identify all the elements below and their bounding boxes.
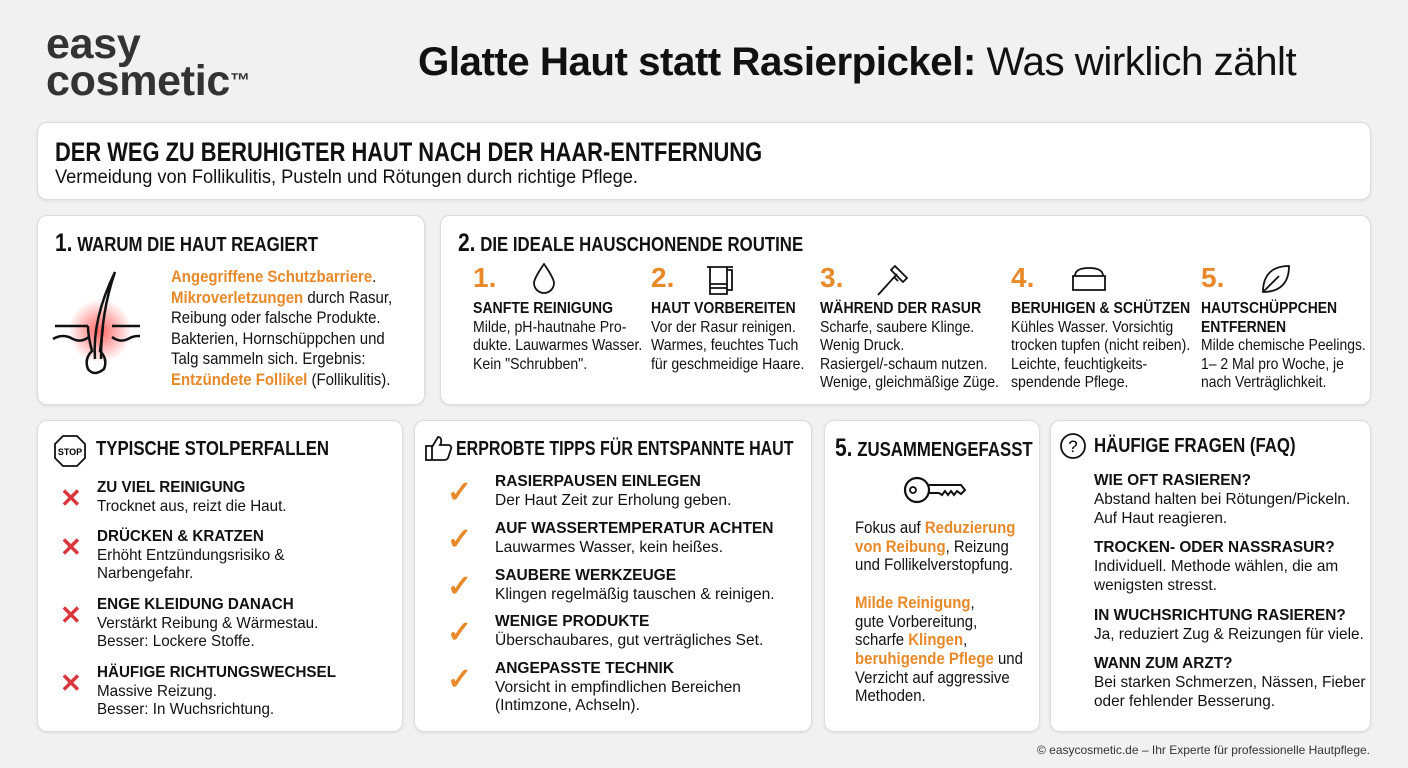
text: von Reibung, Reizung: [855, 537, 1009, 556]
items: Besser: In Wuchsrichtung.: [97, 701, 274, 718]
items: ✓: [447, 570, 472, 603]
questions: Abstand halten bei Rötungen/Pickeln.: [1094, 491, 1350, 508]
text: Entzündete Follikel (Follikulitis).: [171, 370, 390, 389]
step 4: Kühles Wasser. Vorsichtig: [1011, 318, 1173, 336]
step 5: nach Verträglichkeit.: [1201, 374, 1326, 391]
icon: razor: [877, 264, 908, 296]
logo: [46, 20, 250, 105]
panel: stolperfallen: [37, 420, 403, 732]
step 5: ENTFERNEN: [1201, 318, 1286, 336]
items: DRÜCKEN & KRATZEN: [97, 528, 264, 545]
items: ✕: [60, 600, 82, 630]
items: Erhöht Entzündungsrisiko &: [97, 546, 285, 564]
icon: towel: [707, 266, 733, 295]
text: Fokus auf Reduzierung: [855, 518, 1015, 537]
questions: Bei starken Schmerzen, Nässen, Fieber: [1094, 674, 1365, 691]
step 4: 4.: [1011, 262, 1034, 293]
step 3: WÄHREND DER RASUR: [820, 300, 981, 317]
text: Angegriffene Schutzbarriere.: [171, 267, 376, 286]
items: Klingen regelmäßig tauschen & reinigen.: [495, 586, 775, 602]
icon: drop: [533, 262, 555, 294]
step 2: Vor der Rasur reinigen.: [651, 318, 796, 336]
items: ZU VIEL REINIGUNG: [97, 479, 245, 496]
step 1: 1.: [473, 262, 496, 293]
step 2: 2.: [651, 262, 674, 293]
questions: WIE OFT RASIEREN?: [1094, 472, 1251, 489]
text: Milde Reinigung,: [855, 593, 975, 612]
step 2: [651, 262, 804, 372]
text: scharfe Klingen,: [855, 630, 967, 649]
text: Methoden.: [855, 686, 926, 705]
title: Glatte Haut statt Rasierpickel: Was wirklich zählt: [418, 39, 1296, 84]
items: WENIGE PRODUKTE: [495, 613, 649, 630]
text: [855, 518, 1023, 705]
questions: oder fehlender Besserung.: [1094, 693, 1275, 710]
step 2: für geschmeidige Haare.: [651, 356, 804, 372]
step 3: Wenige, gleichmäßige Züge.: [820, 374, 999, 391]
step 5: [1201, 262, 1366, 391]
step 5: 1– 2 Mal pro Woche, je: [1201, 356, 1344, 372]
items: Narbengefahr.: [97, 565, 193, 582]
heading: 2. DIE IDEALE HAUSCHONENDE ROUTINE: [458, 229, 803, 257]
items: [60, 479, 336, 718]
text: Verzicht auf aggressive: [855, 668, 1010, 687]
panel: warum die haut reagiert: [37, 215, 425, 405]
icon: cream jar: [1072, 267, 1106, 291]
text: Mikroverletzungen durch Rasur,: [171, 288, 392, 307]
step 1: Kein "Schrubben".: [473, 356, 587, 372]
questions: Ja, reduziert Zug & Reizungen für viele.: [1094, 626, 1364, 643]
step 3: Rasiergel/-schaum nutzen.: [820, 356, 987, 372]
items: Verstärkt Reibung & Wärmestau.: [97, 614, 318, 632]
step 3: Scharfe, saubere Klinge.: [820, 318, 974, 336]
items: ✓: [447, 523, 472, 556]
items: Der Haut Zeit zur Erholung geben.: [495, 492, 731, 508]
items: ✓: [447, 616, 472, 649]
step 1: [473, 262, 642, 372]
panel: tipps: [414, 420, 812, 732]
heading: HÄUFIGE FRAGEN (FAQ): [1094, 435, 1296, 457]
questions: [1094, 472, 1366, 710]
icon: thumbs up: [425, 436, 452, 461]
icon: question: ?: [1068, 437, 1078, 456]
panel: banner: [37, 122, 1371, 200]
step 4: Leichte, feuchtigkeits-: [1011, 356, 1147, 372]
questions: wenigsten stresst.: [1094, 577, 1217, 594]
step 1: SANFTE REINIGUNG: [473, 300, 613, 317]
step 4: trocken tupfen (nicht reiben).: [1011, 337, 1190, 354]
panel: faq: [1050, 420, 1371, 732]
step 2: Warmes, feuchtes Tuch: [651, 337, 798, 354]
heading: 1. WARUM DIE HAUT REAGIERT: [55, 229, 318, 257]
items: ENGE KLEIDUNG DANACH: [97, 596, 294, 613]
items: HÄUFIGE RICHTUNGSWECHSEL: [97, 664, 336, 681]
questions: TROCKEN- ODER NASSRASUR?: [1094, 539, 1335, 556]
items: Lauwarmes Wasser, kein heißes.: [495, 538, 723, 556]
icon: key: [904, 476, 966, 504]
step 4: BERUHIGEN & SCHÜTZEN: [1011, 300, 1190, 317]
logo: cosmetic™: [46, 57, 250, 105]
text: Talg sammeln sich. Ergebnis:: [171, 349, 366, 368]
step 5: Milde chemische Peelings.: [1201, 337, 1366, 354]
items: ✓: [447, 476, 472, 509]
questions: Individuell. Methode wählen, die am: [1094, 558, 1338, 575]
step 5: HAUTSCHÜPPCHEN: [1201, 300, 1337, 317]
logo: easy: [46, 20, 140, 68]
panel: zusammengefasst: [824, 420, 1040, 732]
heading: TYPISCHE STOLPERFALLEN: [96, 438, 329, 460]
text: beruhigende Pflege und: [855, 649, 1023, 668]
text: gute Vorbereitung,: [855, 612, 977, 631]
banner subtitle: Vermeidung von Follikulitis, Pusteln und Rötungen durch richtige Pflege.: [55, 167, 638, 188]
items: ✕: [60, 532, 82, 562]
items: ✓: [447, 663, 472, 696]
items: AUF WASSERTEMPERATUR ACHTEN: [495, 520, 773, 537]
heading: 5. ZUSAMMENGEFASST: [835, 434, 1033, 462]
items: Vorsicht in empfindlichen Bereichen: [495, 678, 741, 696]
items: (Intimzone, Achseln).: [495, 697, 640, 714]
questions: Auf Haut reagieren.: [1094, 510, 1227, 527]
step 3: Wenig Druck.: [820, 337, 904, 354]
text: [171, 267, 392, 389]
panel: routine: [440, 215, 1371, 405]
step 3: [820, 262, 999, 391]
banner heading: DER WEG ZU BERUHIGTER HAUT NACH DER HAAR-ENTFERNUNG: [55, 137, 762, 167]
questions: IN WUCHSRICHTUNG RASIEREN?: [1094, 607, 1346, 624]
items: Besser: Lockere Stoffe.: [97, 633, 255, 650]
items: ✕: [60, 668, 82, 698]
items: Massive Reizung.: [97, 682, 217, 700]
step 2: HAUT VORBEREITEN: [651, 300, 796, 317]
text: Bakterien, Hornschüppchen und: [171, 329, 385, 348]
items: ANGEPASSTE TECHNIK: [495, 660, 674, 677]
items: [447, 473, 775, 714]
icon: question: [1060, 433, 1086, 459]
text: und Follikelverstopfung.: [855, 555, 1013, 574]
step 4: spendende Pflege.: [1011, 374, 1128, 391]
step 5: 5.: [1201, 262, 1224, 293]
step 4: [1011, 262, 1190, 391]
items: ✕: [60, 483, 82, 513]
text: Reibung oder falsche Produkte.: [171, 308, 381, 327]
icon: leaf: [1262, 265, 1290, 293]
icon: hair follicle: [52, 272, 140, 374]
icon: stop: [54, 435, 86, 467]
items: Überschaubares, gut verträgliches Set.: [495, 632, 763, 648]
step 1: Milde, pH-hautnahe Pro-: [473, 318, 626, 336]
items: SAUBERE WERKZEUGE: [495, 567, 676, 584]
items: Trocknet aus, reizt die Haut.: [97, 498, 287, 514]
questions: WANN ZUM ARZT?: [1094, 655, 1232, 672]
footer: © easycosmetic.de – Ihr Experte für professionelle Hautpflege.: [1037, 743, 1370, 757]
heading: ERPROBTE TIPPS FÜR ENTSPANNTE HAUT: [456, 438, 794, 460]
step 1: dukte. Lauwarmes Wasser.: [473, 337, 642, 354]
step 3: 3.: [820, 262, 843, 293]
items: RASIERPAUSEN EINLEGEN: [495, 473, 701, 490]
icon: stop: STOP: [58, 447, 82, 457]
